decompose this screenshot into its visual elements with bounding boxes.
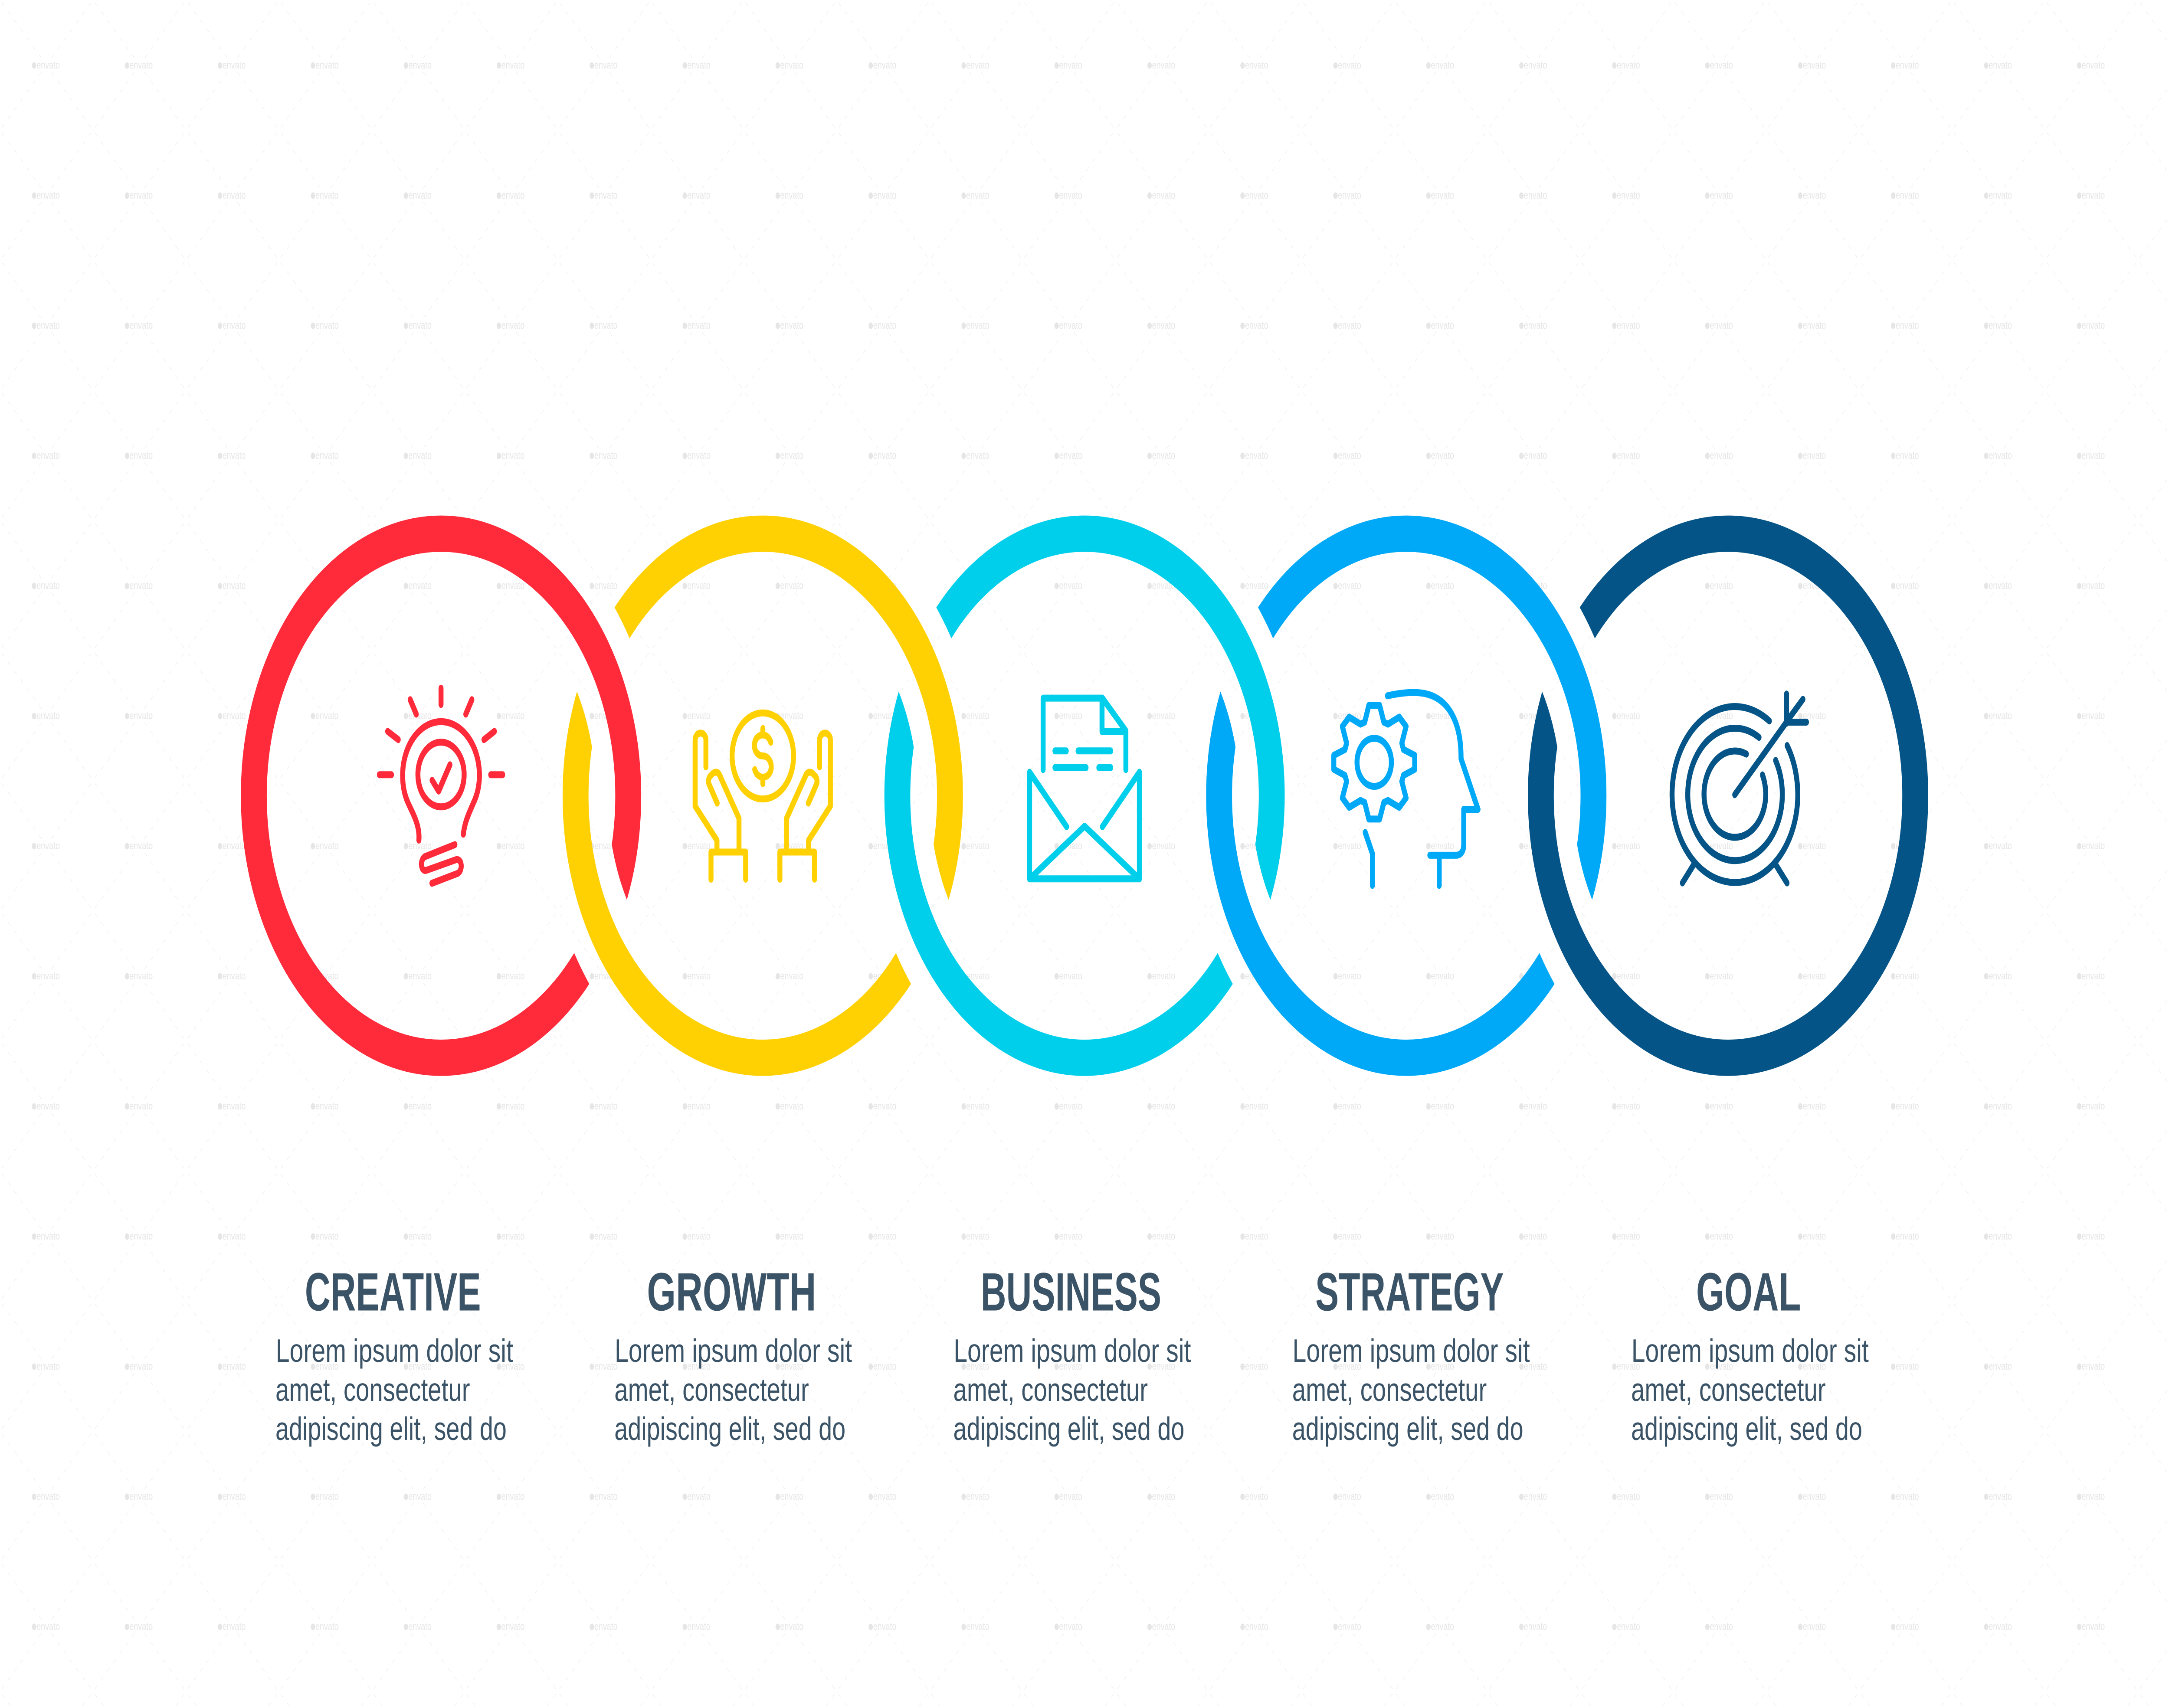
ring: goal (navy) bbox=[1541, 533, 1915, 1058]
icon: head with gear bbox=[1334, 693, 1478, 885]
interlocking rings chain bbox=[254, 533, 1915, 1058]
body text: growth: amet, consectetur bbox=[614, 1371, 809, 1408]
body text: growth bbox=[614, 1332, 852, 1447]
text block: strategy bbox=[1292, 1262, 1530, 1447]
text block: creative bbox=[275, 1262, 513, 1447]
body text: creative: adipiscing elit, sed do bbox=[275, 1410, 507, 1447]
body text: business bbox=[953, 1332, 1191, 1447]
body text: growth: adipiscing elit, sed do bbox=[614, 1410, 845, 1447]
heading: goal: GOAL bbox=[1696, 1262, 1801, 1322]
body text: creative: amet, consectetur bbox=[275, 1371, 470, 1408]
heading: strategy: STRATEGY bbox=[1315, 1262, 1504, 1322]
body text: goal: adipiscing elit, sed do bbox=[1631, 1410, 1862, 1447]
body text: strategy: Lorem ipsum dolor sit bbox=[1292, 1332, 1530, 1369]
body text: creative: Lorem ipsum dolor sit bbox=[276, 1332, 513, 1369]
body text: strategy: amet, consectetur bbox=[1292, 1371, 1487, 1408]
heading: creative: CREATIVE bbox=[305, 1262, 481, 1322]
ring: creative (red) bbox=[254, 533, 628, 1058]
ring: business (cyan) bbox=[897, 533, 1272, 1058]
icon: light bulb with check mark bbox=[380, 688, 503, 883]
body text: growth: Lorem ipsum dolor sit bbox=[615, 1332, 852, 1369]
body text: creative bbox=[275, 1332, 513, 1447]
ring: growth (yellow) bbox=[576, 533, 950, 1058]
body text: business: adipiscing elit, sed do bbox=[953, 1410, 1184, 1447]
text block: growth bbox=[614, 1262, 852, 1447]
body text: goal bbox=[1631, 1332, 1869, 1447]
heading: business: BUSINESS bbox=[981, 1262, 1161, 1322]
body text: goal: amet, consectetur bbox=[1631, 1371, 1826, 1408]
body text: strategy: adipiscing elit, sed do bbox=[1292, 1410, 1524, 1447]
body text: business: amet, consectetur bbox=[953, 1371, 1148, 1408]
body text: goal: Lorem ipsum dolor sit bbox=[1632, 1332, 1869, 1369]
icon: hands holding dollar coin bbox=[695, 713, 830, 879]
body text: strategy bbox=[1292, 1332, 1530, 1447]
text block: goal bbox=[1631, 1262, 1869, 1447]
icon: open envelope with letter bbox=[1029, 698, 1140, 879]
body text: business: Lorem ipsum dolor sit bbox=[953, 1332, 1191, 1369]
ring: strategy (blue) bbox=[1219, 533, 1593, 1058]
text block: business bbox=[953, 1262, 1191, 1447]
icon: target with arrow bbox=[1672, 694, 1806, 883]
heading: growth: GROWTH bbox=[647, 1262, 816, 1322]
